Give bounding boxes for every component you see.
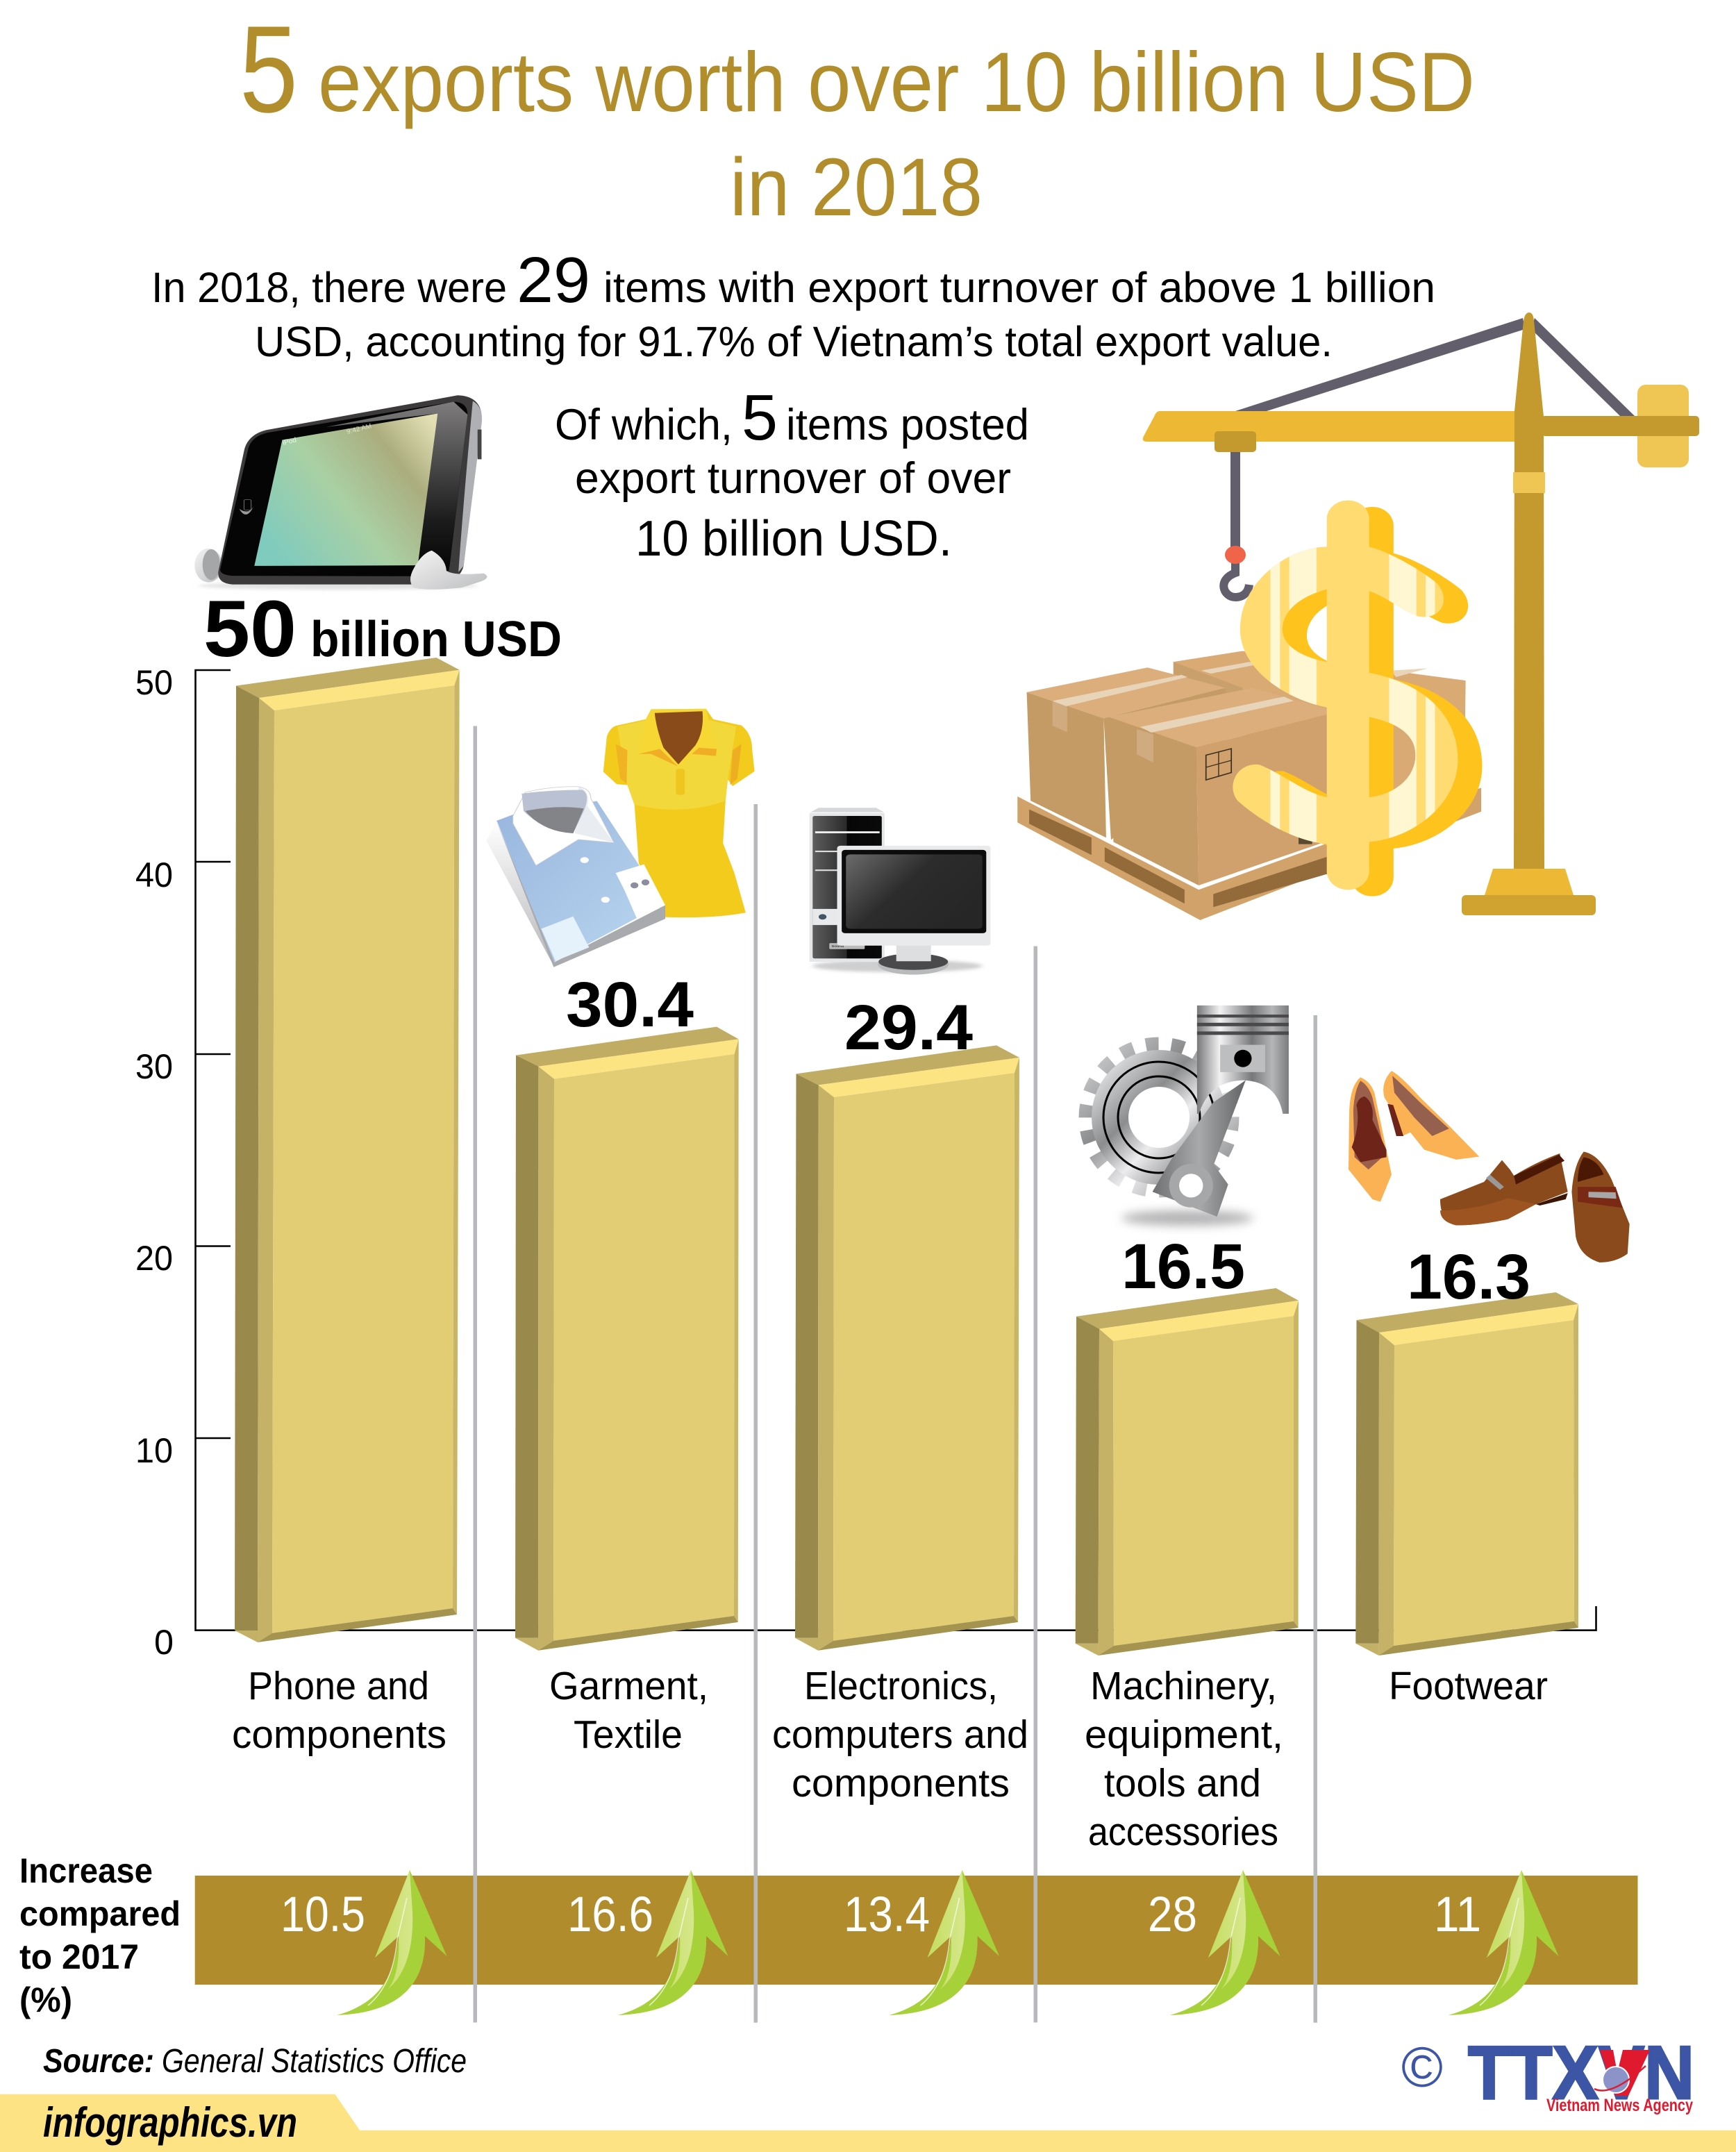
bar values: 16.3 <box>1407 1242 1530 1312</box>
subheading: of which 5 items: items posted <box>786 401 1029 449</box>
source <box>43 2043 467 2080</box>
bar values: 29.4 <box>844 992 973 1063</box>
category labels: equipment, <box>1085 1712 1283 1757</box>
increase label: Increase <box>19 1851 153 1890</box>
intro text: USD, accounting for 91.7% of Vietnam’s total export value. <box>255 318 1333 365</box>
subheading: of which 5 items: Of which, <box>555 401 733 449</box>
axis labels: 40 <box>135 856 173 894</box>
bar: Garment, Textile <box>515 1027 739 1651</box>
bar values: 16.5 <box>1121 1231 1245 1302</box>
increase values: 11 <box>1434 1887 1481 1942</box>
category labels: components <box>232 1712 446 1757</box>
axis labels: 10 <box>135 1431 173 1470</box>
bar: Electronics, computers and components <box>795 1045 1019 1651</box>
agency logo: TTXVN <box>1468 2030 1694 2115</box>
value label: 50 billion USD: 50 <box>203 585 297 674</box>
axis labels <box>135 663 174 1662</box>
increase label: compared <box>19 1894 181 1933</box>
icon: dollar sign <box>1233 501 1482 896</box>
icon: desktop computer <box>810 808 990 975</box>
agency logo: Vietnam News Agency <box>1546 2096 1693 2115</box>
icon: polo and shirt <box>486 709 755 967</box>
category labels: Phone and <box>248 1664 429 1708</box>
bar: Phone and components <box>235 658 460 1642</box>
agency logo: © <box>1401 2036 1443 2099</box>
subheading: of which 5 items: 10 billion USD. <box>635 511 952 567</box>
increase label: to 2017 <box>19 1937 139 1976</box>
category labels: components <box>792 1761 1010 1805</box>
source: Source: <box>43 2043 154 2080</box>
increase values: 28 <box>1148 1887 1197 1942</box>
increase label: (%) <box>19 1980 72 2019</box>
column dividers <box>474 726 1317 2023</box>
increase label <box>19 1851 181 2019</box>
category labels: Footwear <box>1389 1664 1548 1708</box>
subheading: of which 5 items: 5 <box>742 381 778 453</box>
subheading: of which 5 items <box>555 381 1029 567</box>
increase values: 16.6 <box>567 1887 653 1942</box>
subheading: of which 5 items: export turnover of over <box>575 454 1011 503</box>
bar values: 30.4 <box>566 969 694 1040</box>
increase values: 13.4 <box>844 1887 930 1942</box>
bar: Machinery, equipment, tools and accessories <box>1076 1288 1299 1655</box>
title: in 2018 <box>730 142 983 233</box>
intro text: items with export turnover of above 1 billion <box>603 264 1435 311</box>
icon: desktop computer: Sound <box>831 945 844 949</box>
arrow: 11 <box>1449 1870 1558 2015</box>
arrow: 10.5 <box>337 1870 447 2015</box>
increase values <box>281 1887 1481 1942</box>
arrow: 28 <box>1170 1870 1280 2015</box>
intro text: 29 <box>517 244 590 316</box>
intro text: In 2018, there were <box>151 264 507 311</box>
value label: 50 billion USD <box>203 585 562 674</box>
axis labels: 30 <box>135 1047 173 1086</box>
category labels: tools and <box>1104 1761 1261 1805</box>
axis labels: 20 <box>135 1239 173 1278</box>
icon: crane <box>1143 312 1699 915</box>
category labels <box>232 1664 1548 1854</box>
icon: tablet with earbuds: 9:42 AM <box>346 422 372 436</box>
icon: tablet with earbuds: iPod <box>282 436 297 447</box>
icon: shoes <box>1349 1071 1630 1262</box>
source: General Statistics Office <box>162 2043 467 2080</box>
title: 5 <box>240 0 298 138</box>
category labels: computers and <box>772 1712 1028 1757</box>
category labels: Machinery, <box>1090 1664 1277 1708</box>
arrow: 16.6 <box>618 1870 728 2015</box>
axis labels: 50 <box>135 663 173 702</box>
icon: tablet with earbuds <box>194 395 487 590</box>
icon: gear and piston <box>1086 1006 1289 1226</box>
increase values: 10.5 <box>281 1887 365 1942</box>
icon: cardboard boxes on pallet <box>1017 651 1481 920</box>
intro text <box>151 244 1435 365</box>
chart axis <box>196 670 1596 1630</box>
bar values <box>566 969 1530 1312</box>
category labels: Garment, <box>549 1664 708 1708</box>
category labels: Textile <box>574 1712 683 1757</box>
footer band <box>0 2094 1736 2152</box>
footer site name: infographics.vn <box>43 2099 297 2146</box>
title <box>240 0 1475 233</box>
title: exports worth over 10 billion USD <box>318 35 1475 129</box>
value label: 50 billion USD: billion USD <box>310 612 562 667</box>
arrow: 13.4 <box>890 1870 999 2015</box>
increase band <box>195 1876 1638 1985</box>
category labels: Electronics, <box>804 1664 998 1708</box>
bar: Footwear <box>1355 1292 1578 1655</box>
axis labels: 0 <box>154 1623 174 1662</box>
category labels: accessories <box>1088 1810 1278 1854</box>
